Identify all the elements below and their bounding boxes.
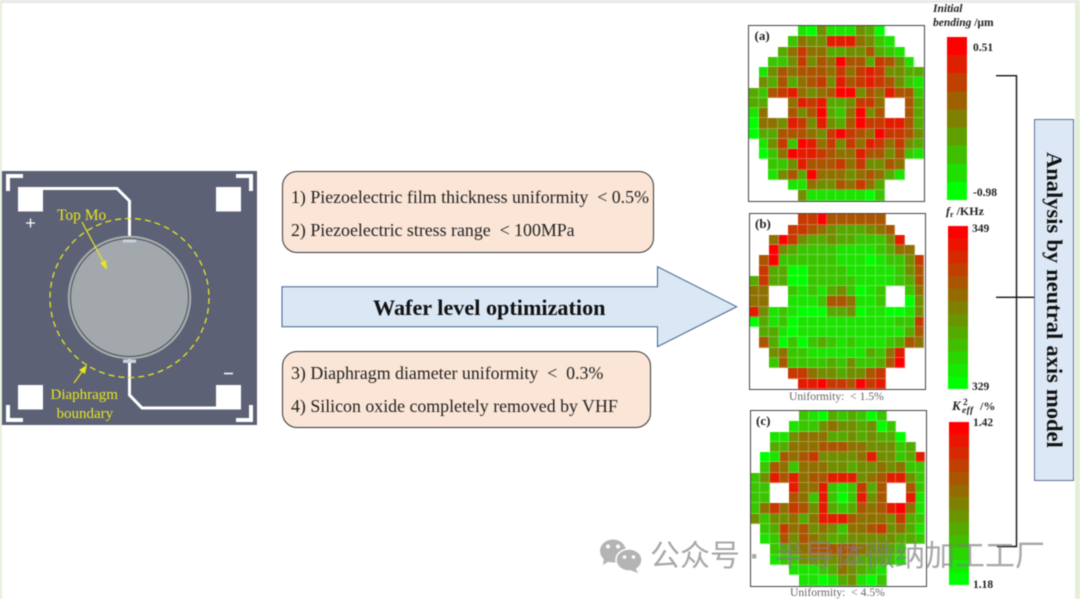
colour bar (a) title: Initial: [933, 3, 962, 15]
arrow: wafer level optimization: Wafer level optimization: [373, 295, 606, 320]
colour bar (c) title: 2: [963, 398, 968, 408]
wafer map (b): resonant frequency: (b): [755, 216, 771, 231]
wafer map (a): initial bending: (a): [754, 28, 770, 42]
colour bar (c) title: [951, 398, 995, 416]
scale min (a): -0.98: [973, 187, 997, 199]
side label: analysis by neutral axis model: Analysis by neutral axis model: [1042, 152, 1067, 448]
watermark text: 公众号: [650, 540, 740, 573]
callout: film requirements: [282, 171, 654, 253]
scale max (b): 349: [972, 223, 989, 235]
wafer map (a): initial bending: [749, 26, 924, 201]
watermark text: [650, 540, 1045, 573]
colour bar (a) title: bending /µm: [933, 17, 994, 29]
callout: diaphragm requirements: [282, 351, 651, 428]
colour bar (b) title: fr /KHz: [946, 204, 984, 219]
colour bar (b): [948, 226, 968, 389]
callout: film requirements: 1) Piezoelectric film thickness uniformity < 0.5%: [291, 187, 649, 207]
colour bar (c) title: /%: [980, 399, 995, 413]
side label: analysis by neutral axis model: [1034, 119, 1074, 481]
colour bar (a) title: [932, 3, 994, 30]
page edge strip: right: [1075, 3, 1080, 599]
wafer map (c): electromechanical coupling: [750, 411, 926, 586]
device micrograph: chip with electrodes and diaphragm: boundary: [56, 406, 114, 422]
arrow: wafer level optimization: [280, 266, 738, 348]
colour bar (c) title: K: [952, 398, 961, 413]
callout: film requirements: 2) Piezoelectric stress range < 100MPa: [291, 220, 575, 240]
device micrograph: chip with electrodes and diaphragm: Diaphragm: [50, 387, 118, 403]
callout: diaphragm requirements: 4) Silicon oxide completely removed by VHF: [291, 396, 618, 416]
colour bar (c): [949, 422, 969, 585]
scale max (a): 0.51: [973, 42, 993, 54]
callout: diaphragm requirements: 3) Diaphragm diameter uniformity < 0.3%: [291, 363, 603, 383]
scale max (c): 1.42: [973, 417, 993, 429]
watermark icon: chat bubbles: [600, 539, 642, 574]
watermark text: ·: [750, 540, 760, 573]
page edge strip: left: [0, 3, 2, 599]
device micrograph: chip with electrodes and diaphragm: Top Mo: [57, 207, 107, 224]
uniformity note (c): Uniformity: < 4.5%: [790, 586, 885, 599]
uniformity note (b): Uniformity: < 1.5%: [789, 390, 884, 403]
device micrograph: chip with electrodes and diaphragm: [1, 170, 258, 426]
colour bar (c) title: eff: [962, 406, 974, 416]
page edge strip: top: [0, 0, 1080, 3]
colour bar (a): [947, 37, 967, 200]
wafer map (b): resonant frequency: [750, 214, 924, 389]
scale min (b): 329: [972, 381, 989, 393]
bracket connecting maps to model: [995, 74, 1035, 548]
scale min (c): 1.18: [973, 579, 993, 591]
wafer map (c): electromechanical coupling: (c): [756, 412, 770, 428]
watermark text: 半导体微纳加工工厂: [775, 540, 1045, 573]
